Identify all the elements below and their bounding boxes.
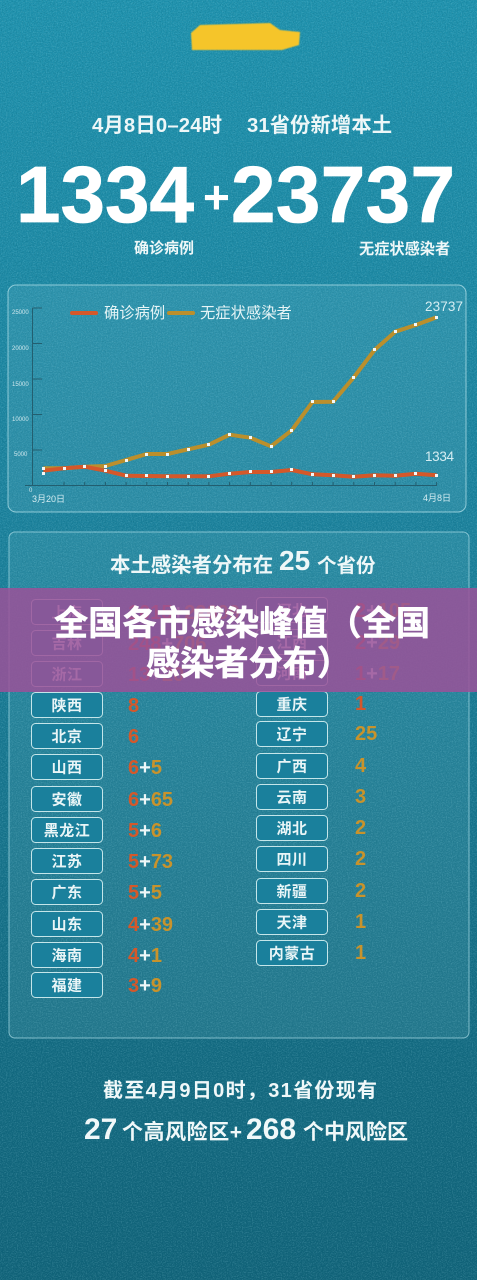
- right column rows: 1: [355, 693, 366, 715]
- x axis labels: 3月20日: [32, 494, 65, 504]
- end value labels: 1334: [425, 449, 454, 464]
- panel: line chart: [8, 285, 466, 512]
- panel: province distribution: [9, 532, 469, 1038]
- right column rows: 1+17: [355, 663, 400, 685]
- left column rows: 5+6: [128, 820, 162, 842]
- left column rows: 1015+22609: [128, 602, 240, 624]
- right column rows: 新疆: [276, 882, 308, 900]
- right column rows: 25: [355, 723, 377, 745]
- left column rows: 浙江: [51, 666, 83, 684]
- right column rows: 河南: [276, 666, 308, 682]
- right column rows: 天津: [276, 914, 308, 932]
- overlay title: 全国各市感染峰值（全国: [54, 605, 430, 643]
- big numbers: +: [203, 171, 230, 223]
- right column rows: 1: [355, 942, 366, 964]
- date heading: [92, 114, 392, 137]
- left column rows: 248+706: [128, 633, 206, 655]
- left column rows: 5+73: [128, 851, 173, 873]
- left column rows: 江苏: [51, 854, 83, 870]
- overlay title: 感染者分布）: [146, 645, 351, 683]
- distribution heading: [110, 545, 376, 577]
- left column rows: 6: [128, 726, 139, 748]
- left column rows: 广东: [51, 884, 83, 902]
- right column rows: 内蒙古: [269, 944, 315, 962]
- left column rows: 安徽: [51, 790, 83, 808]
- risk area summary: 个高风险区+: [122, 1120, 242, 1144]
- y axis labels: 25000: [12, 310, 29, 316]
- legend: [72, 305, 292, 322]
- y axis labels: [12, 310, 33, 494]
- left column rows: 13+20: [128, 664, 184, 686]
- asymptomatic line: [43, 317, 437, 468]
- distribution heading: 个省份: [317, 555, 376, 577]
- right column rows: 4: [355, 755, 367, 777]
- legend: 无症状感染者: [200, 305, 292, 322]
- date heading: 4月8日0–24时: [92, 114, 222, 137]
- right column rows: 2: [355, 817, 366, 839]
- x axis labels: 4月8日: [423, 493, 451, 503]
- right column rows: 广西: [276, 758, 308, 776]
- purple overlay band: [0, 588, 477, 692]
- left column rows: 6+5: [128, 757, 162, 779]
- overlay title: [54, 605, 430, 683]
- risk area summary: [84, 1079, 408, 1146]
- right column rows: 江西: [276, 634, 308, 652]
- right column rows: [256, 598, 411, 966]
- end value labels: 23737: [425, 299, 463, 314]
- left column rows: 陕西: [51, 698, 83, 714]
- data point markers: [42, 316, 438, 478]
- left column rows: 北京: [51, 728, 83, 746]
- left column rows: 6+65: [128, 789, 173, 811]
- left column rows: 黑龙江: [44, 822, 90, 840]
- right column rows: 2: [355, 880, 366, 902]
- left column rows: 上海: [51, 604, 83, 622]
- left column rows: 吉林: [51, 634, 83, 652]
- end value labels: [425, 299, 463, 464]
- x axis labels: [32, 493, 451, 504]
- left column rows: 山东: [51, 916, 83, 934]
- y axis labels: 5000: [14, 452, 28, 458]
- distribution heading: 25: [279, 545, 310, 576]
- left column rows: 山西: [51, 760, 83, 776]
- number captions: [134, 239, 450, 258]
- left column rows: 4+1: [128, 945, 162, 967]
- y axis labels: 10000: [12, 417, 29, 423]
- right column rows: 辽宁: [276, 726, 308, 744]
- right column rows: 1: [355, 911, 366, 933]
- big numbers: 1334: [16, 150, 194, 239]
- left column rows: 3+9: [128, 975, 162, 997]
- left column rows: 海南: [51, 946, 83, 964]
- risk area summary: 268: [246, 1113, 296, 1146]
- right column rows: 湖北: [276, 820, 308, 838]
- right column rows: 河北: [276, 602, 308, 620]
- right column rows: 2+105: [355, 600, 411, 622]
- right column rows: 3: [355, 786, 366, 808]
- right column rows: 2: [355, 848, 366, 870]
- distribution heading: 本土感染者分布在: [110, 554, 273, 577]
- legend: 确诊病例: [104, 305, 165, 322]
- right column rows: 重庆: [276, 696, 308, 714]
- right column rows: 四川: [276, 852, 308, 868]
- left column rows: [32, 600, 240, 998]
- y axis labels: 20000: [12, 346, 29, 352]
- left column rows: 5+5: [128, 882, 162, 904]
- confirmed line: [43, 467, 437, 477]
- redacted yellow logo: [191, 23, 300, 50]
- left column rows: 4+39: [128, 914, 173, 936]
- right column rows: 2+29: [355, 632, 400, 654]
- y axis labels: 0: [29, 488, 33, 494]
- left column rows: 8: [128, 695, 139, 717]
- left column rows: 福建: [51, 976, 83, 994]
- right column rows: 云南: [276, 790, 308, 806]
- chart axes: [25, 308, 437, 486]
- big numbers: [16, 150, 455, 239]
- risk area summary: 截至4月9日0时，31省份现有: [103, 1079, 377, 1102]
- risk area summary: 27: [84, 1113, 117, 1146]
- number captions: 确诊病例: [134, 239, 194, 257]
- date heading: 31省份新增本土: [247, 114, 392, 137]
- big numbers: 23737: [231, 150, 455, 239]
- risk area summary: 个中风险区: [303, 1120, 408, 1144]
- number captions: 无症状感染者: [359, 240, 450, 258]
- y axis labels: 15000: [12, 382, 29, 388]
